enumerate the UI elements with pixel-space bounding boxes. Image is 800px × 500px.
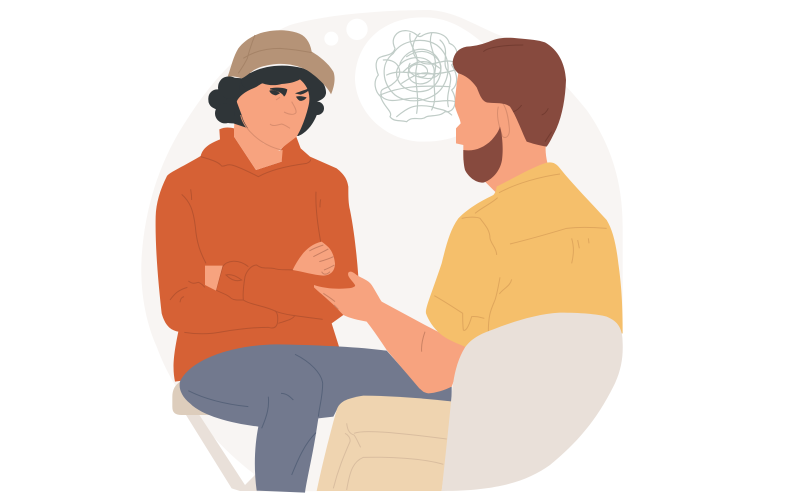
man: shirt — [426, 162, 623, 347]
man: neck and face — [455, 73, 552, 197]
boy: jeans — [180, 344, 452, 493]
tangled thoughts scribble — [375, 31, 458, 122]
stool seat — [172, 382, 212, 415]
man: beard — [463, 127, 503, 183]
boy: hidden wrist — [205, 266, 223, 291]
hoodie fold lines — [170, 157, 323, 334]
man: pants — [317, 396, 453, 491]
eyes and brows — [270, 88, 311, 97]
stool — [172, 382, 258, 491]
background blob — [141, 10, 623, 492]
boy: hair — [208, 66, 326, 136]
boy: fist — [293, 242, 335, 276]
earring — [234, 101, 237, 104]
nose, mouth and jaw lines — [241, 97, 296, 150]
stool legs — [185, 413, 258, 491]
boy: bucket hat — [228, 30, 335, 94]
thought bubble — [324, 17, 483, 142]
man: armchair back — [442, 313, 623, 491]
man: arm and hand — [314, 272, 467, 393]
boy: neck — [234, 100, 283, 170]
boy: hoodie — [156, 127, 360, 382]
boy: face — [234, 79, 311, 151]
man: hair — [453, 38, 566, 147]
